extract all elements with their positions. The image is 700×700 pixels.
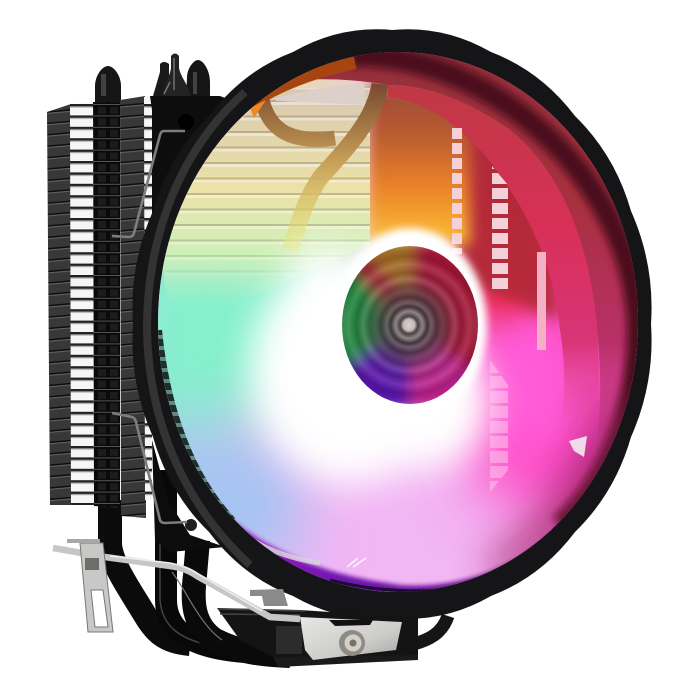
fins: outer dark column (47, 104, 71, 505)
fan mounting brackets (150, 96, 235, 552)
small scratch reflection (347, 558, 366, 567)
latch plate (80, 543, 113, 632)
plate slot (329, 620, 373, 626)
crimson rim, top and right (300, 52, 638, 442)
fan frame with scalloped rim (132, 29, 652, 619)
vertical fin slots, upper right (452, 126, 546, 350)
wire fan clip: lower (112, 413, 187, 523)
white core glow (250, 245, 490, 485)
retention tab (250, 589, 288, 606)
white reflection patch (569, 436, 587, 457)
hub colour wash (342, 246, 478, 404)
white window at top of fan (275, 84, 366, 105)
fan blade arcs (262, 84, 380, 250)
fan lens with RGB glow (158, 52, 638, 592)
purple bottom rim (234, 518, 528, 592)
magenta glow right of the hub (490, 315, 570, 455)
left edge fin stubs (158, 330, 235, 519)
glow base (150, 40, 650, 600)
rim lower right (490, 400, 622, 570)
CPU base block (217, 589, 418, 667)
colour sectors (158, 56, 638, 568)
lower fin slots through glow (490, 360, 508, 492)
heat pipes below the fin stack (110, 470, 448, 656)
heatsink fin stack (47, 96, 152, 518)
fins: white column (70, 103, 94, 505)
fins: inner white edge (144, 96, 152, 500)
hub concentric rings (342, 246, 478, 404)
steel mounting plate (300, 617, 402, 660)
dim red behind top right fins (455, 134, 560, 328)
pale streak lower left (254, 538, 320, 566)
dark line along bottom rim (330, 578, 436, 592)
illustration: RGB tower CPU cooler (47, 29, 652, 668)
pink blade ring (388, 85, 599, 440)
hot red next to the hub (480, 280, 555, 340)
base fins (218, 609, 305, 615)
fan frame highlight on the left (147, 92, 250, 565)
wire fan clip: upper (112, 131, 185, 237)
fins: inner dark column (120, 96, 146, 518)
beige fin window, upper left (163, 88, 370, 300)
dark wine outer rim, top and right (350, 56, 638, 525)
fins: centre black column with pipes (93, 102, 120, 508)
spring clip arm and latch (53, 539, 300, 632)
mounting screw (339, 630, 365, 656)
orange rim strip, upper left (250, 62, 355, 103)
orange column behind hub top (368, 85, 470, 245)
hub halo (350, 222, 493, 391)
heat pipe caps (95, 54, 210, 102)
fan hub (342, 246, 478, 404)
